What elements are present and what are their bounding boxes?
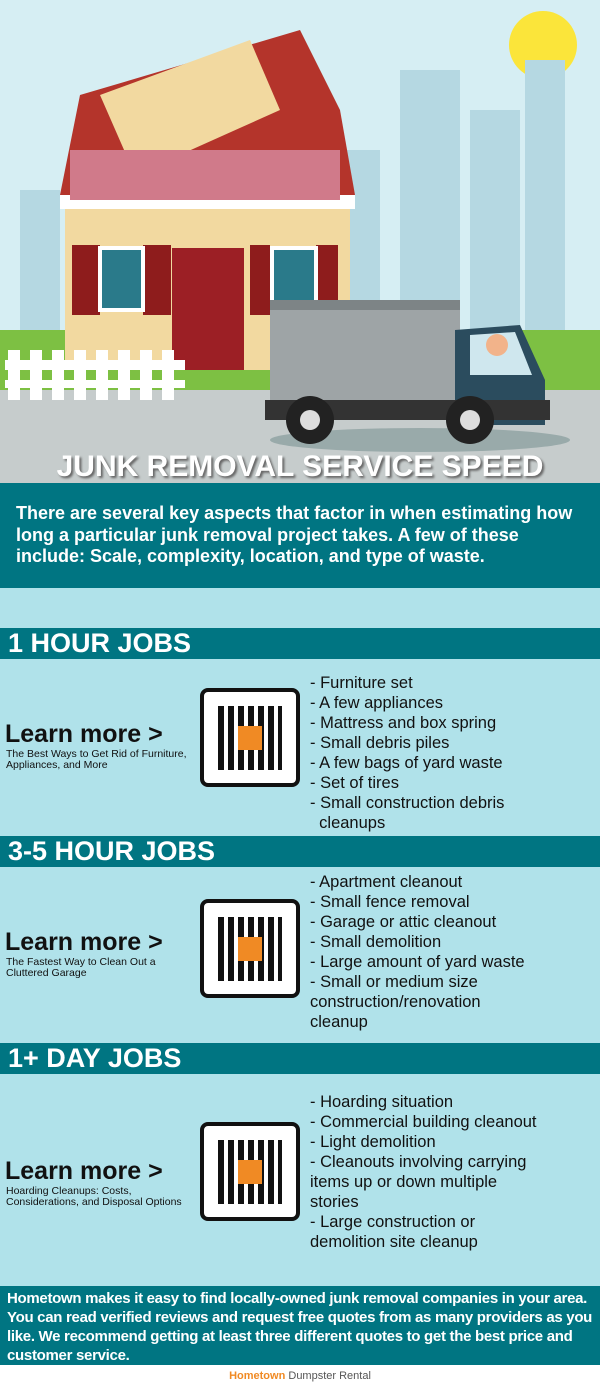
city skyline xyxy=(20,60,565,340)
fence xyxy=(5,350,185,400)
learn more 1: The Best Ways to Get Rid of Furniture, Appliances, and More xyxy=(6,748,187,771)
heading: 1+ day jobs xyxy=(0,1043,600,1074)
list 2: cleanup xyxy=(310,1013,368,1031)
intro panel: There are several key aspects that factor in when estimating how long a particular junk removal project takes. A few of these include: Scale, complexity, location, and type of waste. xyxy=(16,503,572,566)
heading: 3-5 hour jobs xyxy=(0,836,600,867)
house xyxy=(60,30,355,370)
learn more 2 xyxy=(5,928,163,979)
heading: 3-5 hour jobs: 3-5 HOUR JOBS xyxy=(8,836,215,866)
footer logo: Hometown Dumpster Rental xyxy=(229,1370,371,1382)
list 1: - Furniture set xyxy=(310,674,413,692)
list 3: - Large construction or xyxy=(310,1213,475,1231)
list 1: cleanups xyxy=(319,814,385,832)
list 3: - Commercial building cleanout xyxy=(310,1113,537,1131)
truck xyxy=(265,300,570,452)
list 2: construction/renovation xyxy=(310,993,481,1011)
list 1: - Small debris piles xyxy=(310,734,449,752)
learn more 3: Learn more > xyxy=(5,1157,163,1185)
list 2: - Large amount of yard waste xyxy=(310,953,525,971)
hero illustration xyxy=(0,0,600,483)
learn more 3 xyxy=(5,1157,182,1208)
list 3: - Light demolition xyxy=(310,1133,436,1151)
list 2: - Small demolition xyxy=(310,933,441,951)
list 1 xyxy=(310,674,504,832)
qr code 2 xyxy=(200,899,300,998)
list 1: - Small construction debris xyxy=(310,794,504,812)
list 3 xyxy=(310,1093,537,1251)
list 3: - Hoarding situation xyxy=(310,1093,453,1111)
icon: sun xyxy=(509,11,577,79)
list 1: - A few bags of yard waste xyxy=(310,754,503,772)
qr code 1 xyxy=(200,688,300,787)
list 1: - A few appliances xyxy=(310,694,443,712)
list 1: - Mattress and box spring xyxy=(310,714,496,732)
learn more 3: Hoarding Cleanups: Costs, Considerations, and Disposal Options xyxy=(6,1185,182,1208)
list 3: items up or down multiple xyxy=(310,1173,497,1191)
list 3: - Cleanouts involving carrying xyxy=(310,1153,526,1171)
intro panel xyxy=(0,483,600,588)
learn more 1: Learn more > xyxy=(5,720,163,748)
heading: 1 hour jobs xyxy=(0,628,600,659)
footer logo xyxy=(0,1365,600,1389)
heading: 1+ day jobs: 1+ DAY JOBS xyxy=(8,1043,181,1073)
learn more 2: The Fastest Way to Clean Out a Cluttered Garage xyxy=(6,956,156,979)
learn more 1 xyxy=(5,720,187,771)
list 2: - Garage or attic cleanout xyxy=(310,913,496,931)
title: JUNK REMOVAL SERVICE SPEED xyxy=(57,450,543,483)
heading: 1 hour jobs: 1 HOUR JOBS xyxy=(8,628,191,658)
list 3: stories xyxy=(310,1193,359,1211)
list 2 xyxy=(310,873,525,1031)
qr code 3 xyxy=(200,1122,300,1221)
list 2: - Small fence removal xyxy=(310,893,470,911)
list 3: demolition site cleanup xyxy=(310,1233,478,1251)
list 2: - Small or medium size xyxy=(310,973,478,991)
footer text panel: Hometown makes it easy to find locally-owned junk removal companies in your area. You can read verified reviews and request free quotes from as many providers as you like. We recommend getting at least three different quotes to get the best price and customer service. xyxy=(7,1290,592,1364)
learn more 2: Learn more > xyxy=(5,928,163,956)
list 1: - Set of tires xyxy=(310,774,399,792)
list 2: - Apartment cleanout xyxy=(310,873,462,891)
